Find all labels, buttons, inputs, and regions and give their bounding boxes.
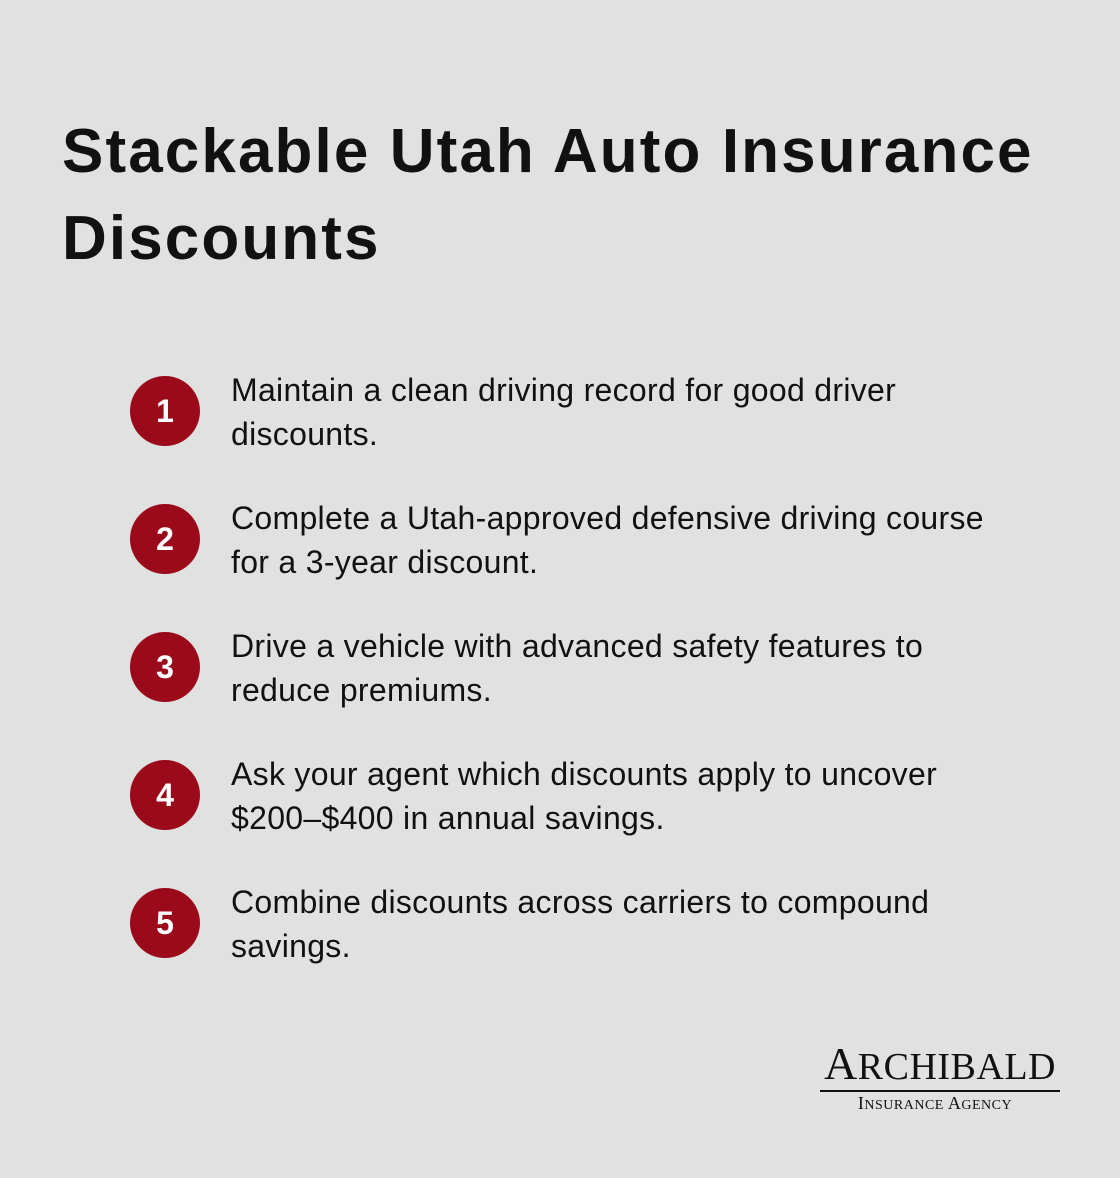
number 4: 4	[156, 777, 174, 813]
number 5: 5	[156, 905, 174, 941]
number 1	[130, 376, 200, 446]
number 5	[130, 888, 200, 958]
item 3: Drive a vehicle with advanced safety features to reduce premiums.	[231, 628, 923, 708]
number 3: 3	[156, 649, 174, 685]
number 3	[130, 632, 200, 702]
number 4	[130, 760, 200, 830]
item 5: Combine discounts across carriers to compound savings.	[231, 884, 929, 964]
item 4: Ask your agent which discounts apply to uncover $200–$400 in annual savings.	[231, 756, 937, 836]
item 2: Complete a Utah-approved defensive driving course for a 3-year discount.	[231, 500, 984, 580]
number 2: 2	[156, 521, 174, 557]
number 2	[130, 504, 200, 574]
logo: ARCHIBALD	[824, 1038, 1056, 1089]
item 1: Maintain a clean driving record for good driver discounts.	[231, 372, 896, 452]
title: Stackable Utah Auto Insurance Discounts	[62, 117, 1034, 273]
number 1: 1	[156, 393, 174, 429]
logo: INSURANCE AGENCY	[858, 1093, 1012, 1113]
logo	[820, 1038, 1060, 1113]
